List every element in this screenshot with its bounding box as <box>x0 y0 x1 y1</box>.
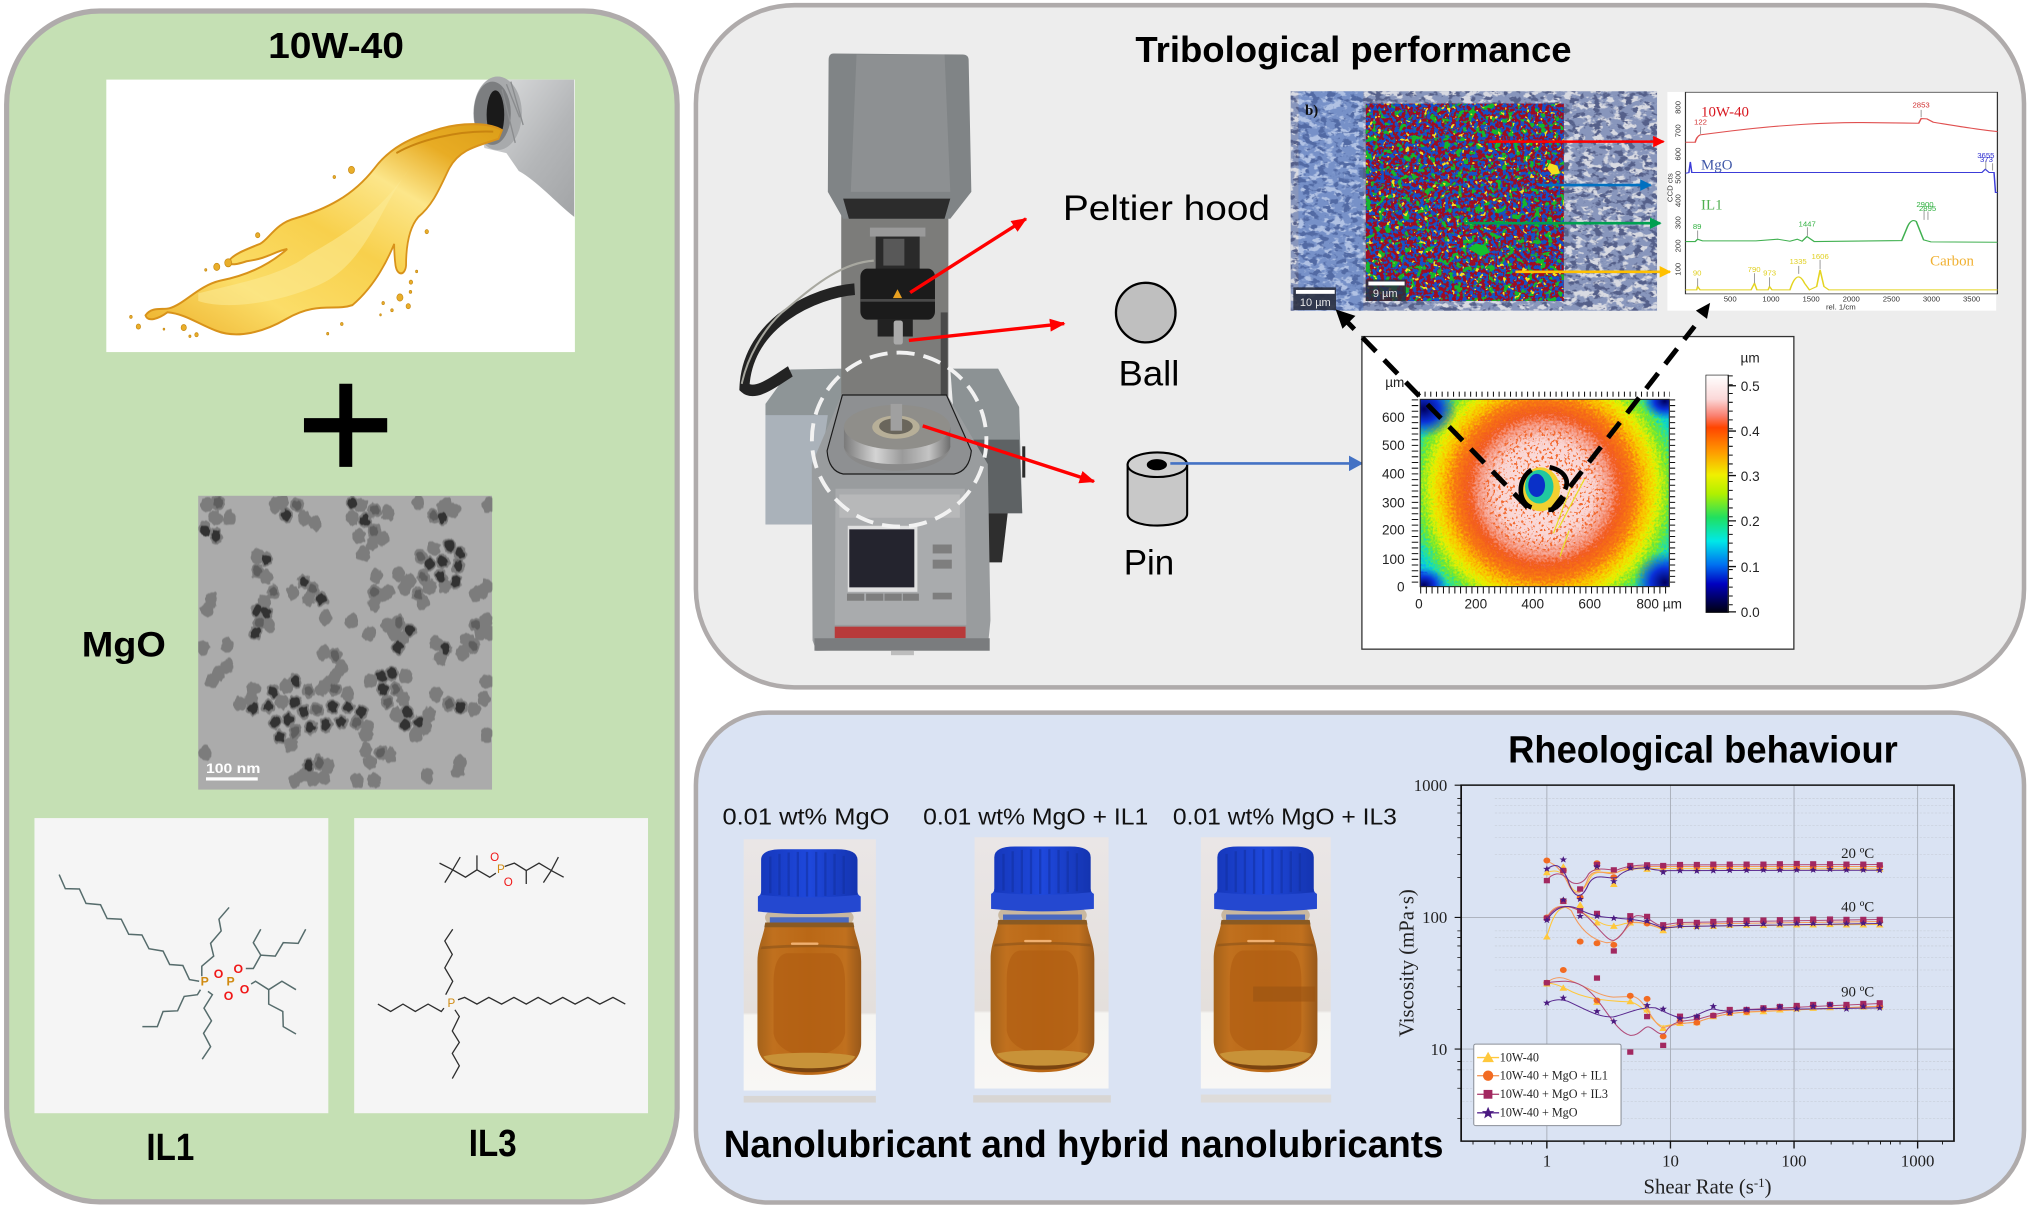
chart: wear profile height map: 300 <box>1382 495 1405 510</box>
chart: wear profile height map: 0.3 <box>1741 469 1760 484</box>
arrow: dashed to microscope view <box>1336 309 1528 507</box>
chart: Raman spectra: 973 <box>1763 269 1776 278</box>
label: Pin: Pin <box>1124 543 1174 583</box>
chart: Raman spectra: 500 <box>1724 295 1737 304</box>
curves: 10W-40 + MgO + IL1 <box>1547 861 1880 1028</box>
chart: Raman spectra: 100 <box>1673 263 1682 276</box>
axis labels: tick values: 1000 <box>1414 776 1447 795</box>
chart: wear profile height map: 400 <box>1382 466 1405 481</box>
callout: ring around wear scar <box>1521 467 1567 510</box>
chart: Raman spectra: 1447 <box>1799 220 1816 229</box>
curves: 10W-40 <box>1547 869 1880 1026</box>
chart: Raman spectra: 790 <box>1748 265 1761 274</box>
axis labels: tick values: 100 <box>1781 1151 1807 1170</box>
curves: 10W-40 + MgO + IL3 <box>1547 865 1880 1035</box>
grid lines <box>1462 799 1954 1118</box>
scale bar: 9 µm <box>1366 280 1406 301</box>
chart: wear profile height map: 600 <box>1578 596 1602 611</box>
image: Raman map over microscope view <box>1291 91 1657 311</box>
chart: wear profile height map: 0 <box>1415 596 1423 611</box>
axis labels: tick values <box>1414 776 1934 1170</box>
chemical structure: IL3: O <box>504 876 513 889</box>
chemical structure: IL1: P <box>201 975 209 989</box>
temperature labels: 20 ºC <box>1841 846 1874 862</box>
photo: vial with MgO and IL3 <box>1201 837 1331 1103</box>
icon: pin <box>1128 452 1187 526</box>
label: IL3: IL3 <box>469 1122 517 1164</box>
arrow: orange to carbon spectrum <box>1515 271 1670 273</box>
chart: Raman spectra: 3655 <box>1977 151 1994 160</box>
chart: Raman spectra: 2500 <box>1883 295 1900 304</box>
chart: Raman spectra: 1335 <box>1790 257 1807 266</box>
chart: wear profile height map: 800 µm <box>1636 596 1682 611</box>
axis labels: tick values: 10 <box>1662 1151 1679 1170</box>
chemical structure: IL1: O <box>234 962 244 976</box>
chart: wear profile height map <box>1362 337 1794 649</box>
curves: 10W-40 + MgO <box>1547 865 1880 1018</box>
chemical structure: IL1: O <box>214 967 224 981</box>
arrow: red to 10W-40 spectrum <box>1489 141 1664 143</box>
chart: wear profile height map: 200 <box>1464 596 1488 611</box>
chart: Raman spectra: 90 <box>1693 269 1701 278</box>
image: rheometer tribometer <box>742 54 1025 655</box>
icon: ball <box>1116 283 1176 342</box>
icon: plus sign <box>304 384 387 467</box>
points: 10W-40 <box>1547 867 1880 1028</box>
chart: Raman spectra: 800 <box>1673 101 1682 114</box>
heading: Rheological behaviour: Rheological behaviour <box>1508 728 1898 770</box>
scale bar: 10 µm <box>1293 287 1336 310</box>
legend: 10W-40 + MgO + IL1 <box>1500 1069 1608 1083</box>
chart: Raman spectra: 700 <box>1673 124 1682 137</box>
panel: base lubricant and additives <box>7 11 677 1202</box>
label: Peltier hood: Peltier hood <box>1063 188 1270 228</box>
points: 10W-40 + MgO + IL3 <box>1547 864 1880 1052</box>
chemical structure: IL1: O <box>224 989 234 1003</box>
chart: wear profile height map: 400 <box>1521 596 1545 611</box>
label: 0.01 wt% MgO + IL3: 0.01 wt% MgO + IL3 <box>1173 804 1397 830</box>
chart: Raman spectra: 1500 <box>1802 295 1820 304</box>
map: red blue green phases <box>1366 104 1564 301</box>
chemical structure: IL3: P <box>448 997 456 1010</box>
chart: Raman spectra: CCD cts <box>1666 173 1675 202</box>
arrow: blue to MgO spectrum <box>1539 184 1651 186</box>
chemical structure: IL1: O <box>240 982 250 996</box>
arrow: to pin <box>923 426 1094 482</box>
panel: tribological performance <box>696 5 2024 687</box>
chart: Raman spectra: Carbon <box>1930 253 1975 269</box>
chart: wear profile height map: µm <box>1741 350 1760 365</box>
chart: Raman spectra: 89 <box>1693 222 1701 231</box>
chart: Raman spectra: 500 <box>1673 171 1682 184</box>
axis title: Shear Rate: ) <box>1765 1176 1772 1198</box>
panel: nanolubricants and rheological behaviour <box>696 713 2024 1203</box>
image: TEM micrograph of MgO nanoparticles <box>198 496 492 790</box>
chart: wear profile height map: 0.2 <box>1741 514 1760 529</box>
chemical structure: IL3: P <box>497 863 505 876</box>
chemical structure: IL3: O <box>490 851 499 864</box>
arrow: pin to wear profile <box>1170 462 1362 464</box>
scale bar: 10 µm: 10 µm <box>1300 297 1331 309</box>
heading: 10W-40: 10W-40 <box>268 25 404 66</box>
label: IL1: IL1 <box>146 1126 194 1168</box>
chart: Raman spectra: IL1 <box>1701 198 1723 214</box>
heading: Tribological performance: Tribological performance <box>1135 29 1572 70</box>
temperature labels <box>1841 846 1874 1001</box>
chart: wear profile height map: µm <box>1385 375 1404 390</box>
label: MgO: MgO <box>82 625 166 664</box>
image: oil pouring from bottle <box>106 77 575 352</box>
points: 10W-40 + MgO + IL1 <box>1547 861 1880 1036</box>
chart: Raman spectra: 122 <box>1694 117 1707 126</box>
chart: wear profile height map: 0.5 <box>1741 379 1760 394</box>
scale bar: 9 µm: 9 µm <box>1373 288 1398 300</box>
legend: 10W-40 <box>1500 1050 1539 1064</box>
label: 0.01 wt% MgO + IL1: 0.01 wt% MgO + IL1 <box>923 804 1148 830</box>
axis labels: tick values: 10 <box>1431 1040 1447 1059</box>
chart: Raman spectra: 400 <box>1673 194 1682 207</box>
temperature labels: 90 ºC <box>1841 985 1874 1001</box>
chart: Raman spectra: 3500 <box>1963 295 1980 304</box>
scale bar: 100 nm <box>206 761 260 781</box>
chemical structure: IL1 <box>34 818 328 1113</box>
chemical structure: IL3 <box>354 818 648 1113</box>
axis title: Shear Rate: -1 <box>1754 1175 1765 1190</box>
chart: wear profile height map: 0.0 <box>1741 605 1760 620</box>
arrow: green to IL1 spectrum <box>1464 222 1660 224</box>
chart: Raman spectra: 373 <box>1980 155 1993 164</box>
chart: Raman spectra: 300 <box>1673 216 1682 229</box>
legend: 10W-40 + MgO <box>1500 1106 1578 1120</box>
photo: vial with MgO and IL1 <box>973 837 1111 1103</box>
chart: wear profile height map: 100 <box>1382 552 1405 567</box>
chart: Raman spectra: 3000 <box>1923 295 1940 304</box>
scale bar: 100 nm: 100 nm <box>206 761 260 776</box>
temperature labels: 40 ºC <box>1841 899 1874 915</box>
chart: Raman spectra: 1000 <box>1762 295 1780 304</box>
heading: Nanolubricant and hybrid nanolubricants: Nanolubricant and hybrid nanolubricants <box>724 1123 1443 1165</box>
chemical structure: IL1: P <box>226 975 235 989</box>
chart: Raman spectra: 2000 <box>1843 295 1860 304</box>
chart: wear profile height map: 500 <box>1382 438 1405 453</box>
arrow: to Peltier hood <box>910 219 1026 293</box>
axis title: Viscosity: Viscosity (mPa·s) <box>1397 889 1419 1037</box>
chart: Raman spectra: 10W-40 <box>1701 104 1749 120</box>
chart: wear profile height map: 0.4 <box>1741 424 1760 439</box>
chart: Raman spectra: rel. 1/cm <box>1826 302 1856 311</box>
label: 0.01 wt% MgO: 0.01 wt% MgO <box>722 804 889 830</box>
chart: Raman spectra: 2895 <box>1919 204 1936 213</box>
text: panel letter b: b) <box>1305 103 1318 119</box>
legend: 10W-40 + MgO + IL3 <box>1500 1087 1608 1101</box>
chart: wear profile height map: 0.1 <box>1741 560 1760 575</box>
axis labels: tick values: 100 <box>1422 908 1447 927</box>
points: 10W-40 + MgO <box>1547 860 1880 1021</box>
chart: Raman spectra: 600 <box>1673 148 1682 161</box>
chart: Raman spectra: MgO <box>1701 158 1733 174</box>
chart: Raman spectra: 2900 <box>1916 200 1934 209</box>
chart: wear profile height map: 0 <box>1397 580 1405 595</box>
marker: dashed region of contact <box>812 353 986 527</box>
arrow: to ball <box>909 324 1064 340</box>
arrow: dashed to Raman spectra <box>1551 303 1710 511</box>
axis labels: tick values: 1000 <box>1901 1151 1934 1170</box>
label: Ball: Ball <box>1119 354 1179 394</box>
photo: vial with MgO nanolubricant <box>744 839 876 1103</box>
legend <box>1474 1044 1621 1126</box>
chart: wear profile height map: 200 <box>1382 523 1405 538</box>
axis labels: tick values: 1 <box>1543 1151 1551 1170</box>
chart: Raman spectra: 200 <box>1673 239 1682 252</box>
chart: wear profile height map: 600 <box>1382 410 1405 425</box>
chart: Raman spectra: 1606 <box>1812 252 1829 261</box>
chart: Raman spectra <box>1666 92 1997 311</box>
chart: Raman spectra: 2853 <box>1912 100 1930 109</box>
axis title: Shear Rate: Shear Rate (s <box>1643 1176 1754 1198</box>
chart: viscosity versus shear rate <box>1397 776 1954 1198</box>
